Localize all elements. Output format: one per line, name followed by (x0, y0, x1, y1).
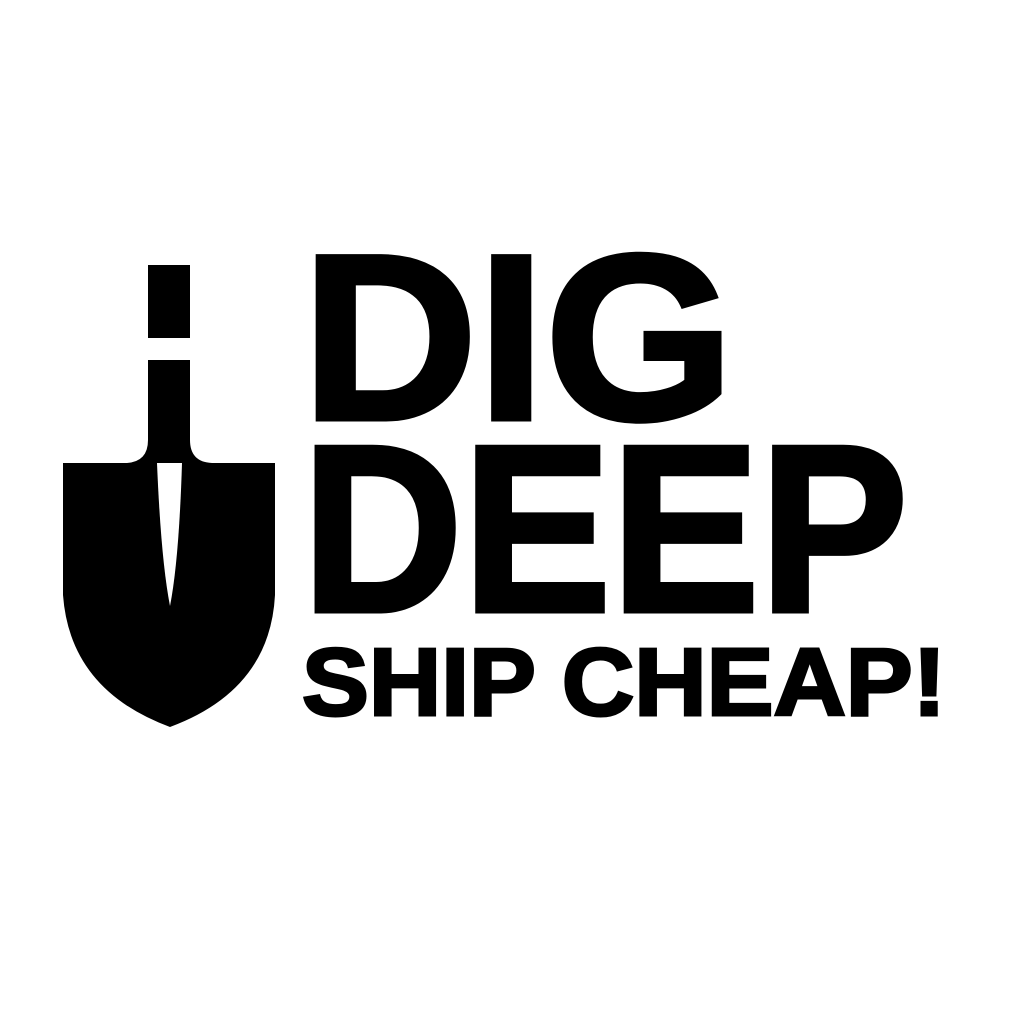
heading: DIG: DIG (302, 206, 734, 470)
heading: DEEP: DEEP (302, 397, 908, 662)
icon: shovel (63, 265, 275, 727)
tagline: SHIP CHEAP!: SHIP CHEAP! (302, 629, 946, 736)
